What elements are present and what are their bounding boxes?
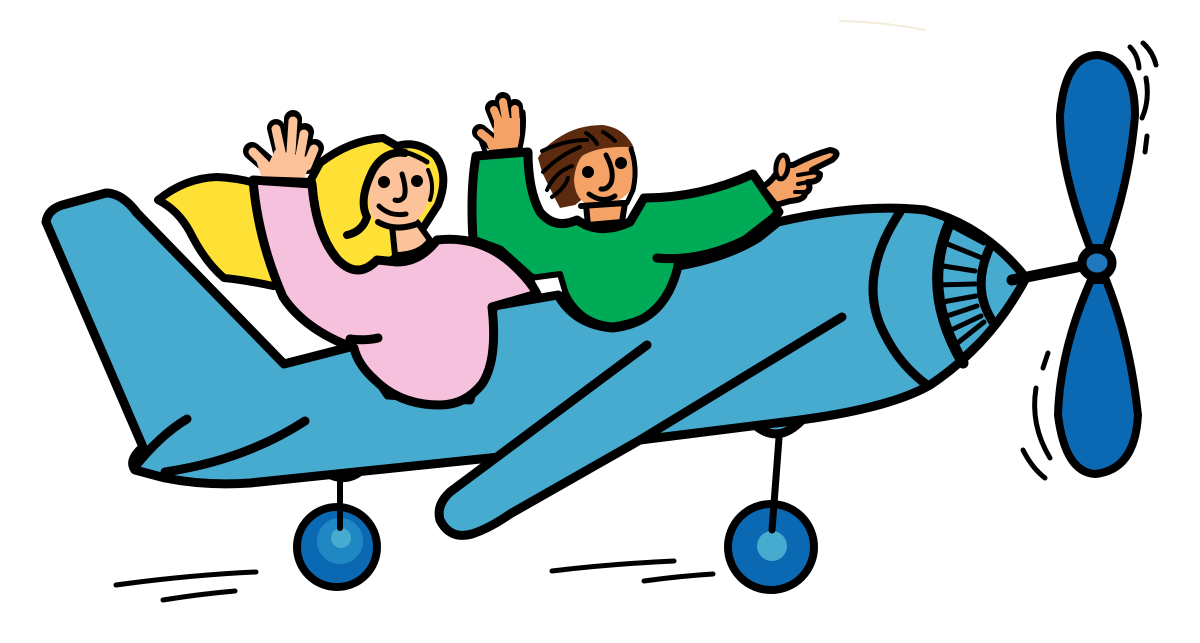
- right landing gear: [728, 420, 814, 590]
- left landing gear: [297, 470, 377, 587]
- engine vents: [935, 227, 990, 355]
- woman's flowing hair: [158, 138, 443, 286]
- woman's arm line: [350, 338, 378, 340]
- plane fuselage and tail: [46, 193, 1026, 484]
- tail stabiliser lines: [134, 419, 305, 472]
- ground speed lines: [116, 561, 713, 600]
- woman's waving hand: [252, 119, 315, 182]
- propeller top blade: [1060, 55, 1135, 248]
- propeller bottom blade: [1058, 280, 1138, 474]
- man's head and hair: [538, 125, 635, 225]
- man's pointing hand: [762, 150, 837, 205]
- propeller hub: [1082, 249, 1112, 277]
- man's arm line: [657, 216, 776, 259]
- woman's face: [347, 152, 432, 235]
- woman's pink sweater: [253, 180, 537, 405]
- man's green sweater: [472, 152, 779, 327]
- white gap between seats: [530, 274, 566, 298]
- man's left hand: [480, 100, 524, 154]
- propeller motion lines: [1023, 43, 1156, 478]
- wing: [439, 317, 842, 535]
- faint tan smudge: [840, 21, 925, 30]
- cowling arcs: [873, 212, 995, 385]
- propeller shaft: [1012, 266, 1082, 280]
- woman's neck: [392, 222, 430, 255]
